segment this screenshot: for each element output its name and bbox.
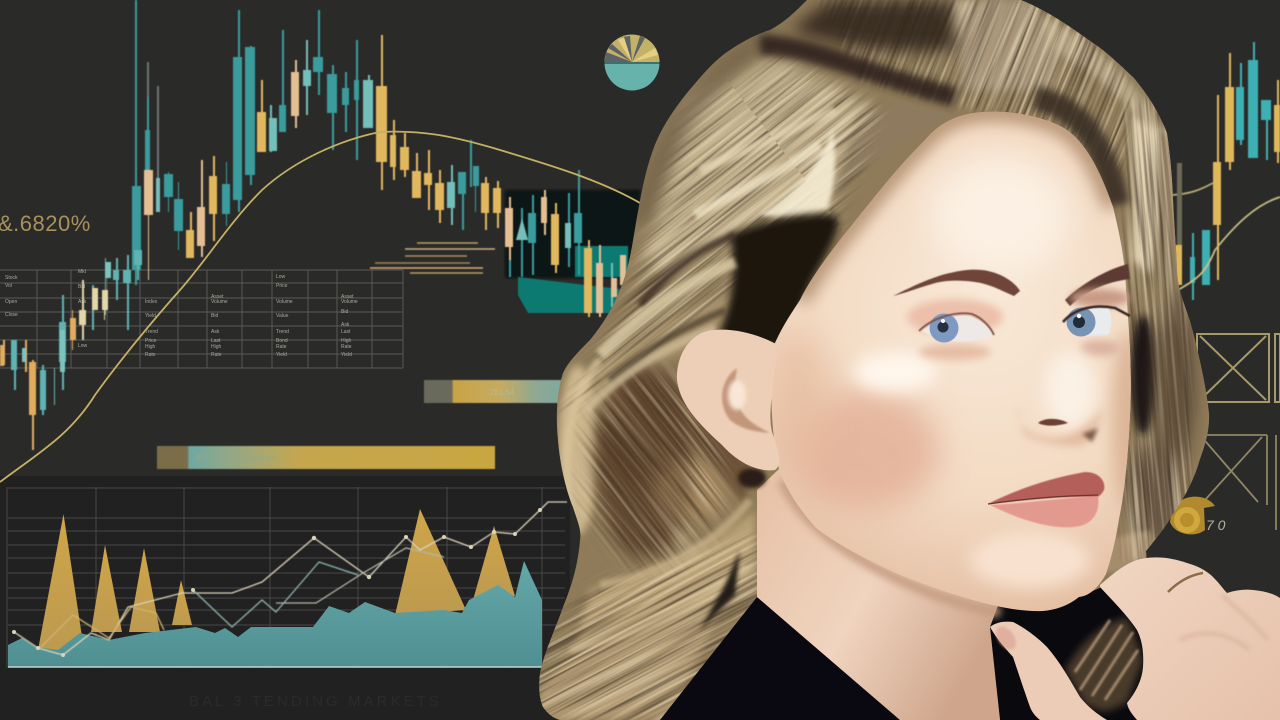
finger — [990, 622, 1107, 720]
hair dark and bright accents — [567, 0, 1190, 650]
chart: area and line chart — [7, 487, 567, 668]
coin value: 7 0 — [1206, 517, 1226, 533]
left eyebrow — [893, 270, 1020, 296]
panel: dark lower chart backdrop — [0, 476, 570, 720]
neck — [757, 468, 1000, 720]
table cell labels: Asset — [211, 294, 224, 300]
table cell labels: Bid — [211, 313, 218, 319]
table cell labels: Rate — [211, 352, 222, 358]
hair — [530, 0, 1230, 720]
candlestick chart: right — [1172, 42, 1280, 300]
table cell labels: High — [211, 344, 222, 350]
chart: data table grid — [0, 269, 403, 368]
table cell labels: Low — [276, 274, 286, 280]
table cell labels: Yield — [341, 352, 352, 358]
table cell labels: Ask — [211, 329, 220, 335]
line series — [14, 502, 567, 655]
candlestick chart: lower left — [0, 250, 142, 450]
table cell labels: Asset — [341, 294, 354, 300]
banner label: $7 56 18 Loukot — [196, 453, 276, 463]
skin blush and highlights — [790, 390, 940, 510]
table cell labels: Volume — [341, 299, 358, 305]
portrait — [530, 0, 1280, 720]
right eyebrow — [1065, 264, 1130, 306]
table cell labels: Low — [78, 343, 88, 349]
teal area — [8, 561, 542, 667]
table cell labels: Vol — [5, 283, 12, 289]
table cell labels: Bid — [341, 309, 348, 315]
table cell labels: High — [341, 338, 352, 344]
face — [770, 112, 1144, 611]
lips — [988, 472, 1104, 527]
dark panel behind candlesticks — [505, 190, 640, 278]
left eye — [907, 299, 1003, 360]
table cell labels: Rate — [341, 344, 352, 350]
nose — [1018, 352, 1103, 446]
table cell labels: Price — [276, 283, 288, 289]
hair under chin — [1065, 618, 1143, 712]
table cell labels: Ask — [341, 322, 350, 328]
table cell labels: Ask — [78, 299, 87, 305]
icon: crossed box two — [1200, 435, 1276, 530]
table cell labels: Last — [211, 338, 221, 344]
gold triangles — [38, 509, 515, 650]
hair shading masses — [540, 0, 1197, 720]
table cell labels: High — [145, 344, 156, 350]
right eye — [1063, 289, 1130, 356]
banner label: 281.54 — [490, 388, 515, 397]
table cell labels: Price — [145, 338, 157, 344]
table cell labels: Last — [341, 329, 351, 335]
ear — [677, 330, 779, 470]
table cell labels: Trend — [276, 329, 289, 335]
jaw shadow — [782, 480, 1000, 612]
table cell labels: Rate — [145, 352, 156, 358]
table cell labels: Index — [145, 299, 158, 305]
table cell labels: Yield — [276, 352, 287, 358]
icon: gold coin — [1170, 497, 1226, 534]
table cell labels: Yield — [145, 313, 156, 319]
icon: crossed box one — [1197, 334, 1280, 402]
table cell labels: Volume — [211, 299, 228, 305]
faint footer caption: BAL 3 TENDING MARKETS — [189, 693, 439, 710]
fingernail — [992, 623, 1020, 653]
line markers — [12, 508, 542, 657]
knuckle shading — [1180, 595, 1268, 650]
banner: upper status bar — [424, 380, 564, 403]
gold trend curve — [0, 132, 640, 482]
candlestick chart: main — [132, 0, 626, 317]
banner: lower status bar — [157, 446, 495, 469]
table cell labels: Bond — [276, 338, 288, 344]
table cell labels: Stock — [5, 275, 18, 281]
hair strand texture — [535, 0, 1210, 720]
table cell labels: Mkt — [78, 269, 87, 275]
table cell labels: Open — [5, 299, 17, 305]
percentage label: &.6820% — [0, 211, 91, 236]
table cell labels — [5, 269, 358, 358]
table cell labels: Close — [5, 312, 18, 318]
text lines block — [370, 243, 495, 273]
ring — [1168, 573, 1203, 592]
hair strands under chin — [1075, 620, 1138, 700]
table cell labels: Rate — [276, 344, 287, 350]
hand — [990, 557, 1280, 720]
under-ear shadow — [738, 468, 766, 488]
table cell labels: Value — [276, 313, 289, 319]
teal block — [518, 246, 628, 313]
table cell labels: Volume — [276, 299, 293, 305]
dark area below chin — [985, 575, 1150, 720]
table cell labels: Trend — [145, 329, 158, 335]
icon: pie chart — [604, 34, 660, 90]
table cell labels: Bid — [78, 284, 85, 290]
black collar — [660, 597, 900, 720]
